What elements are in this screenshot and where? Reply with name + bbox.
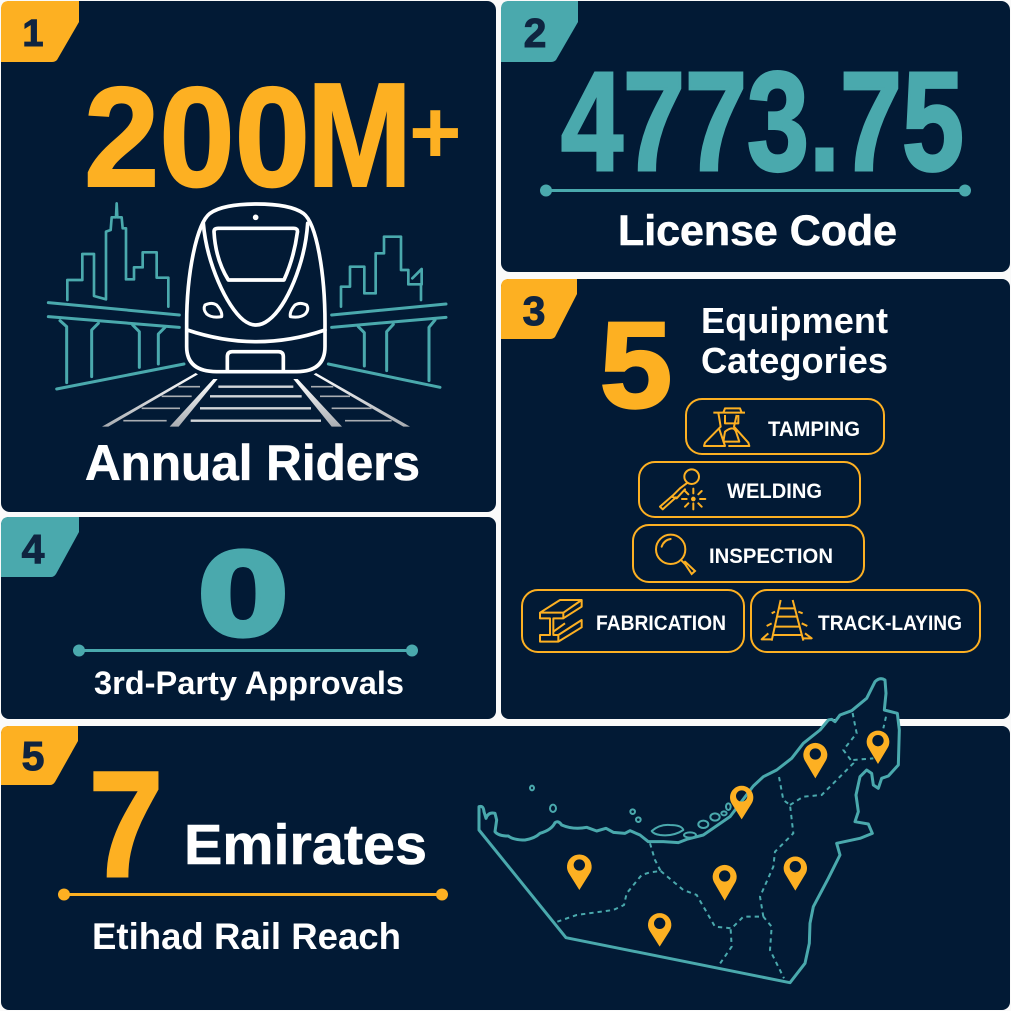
caption: rail reach: Etihad Rail Reach (92, 916, 401, 957)
panel: emirates reach (1, 679, 1010, 1010)
icon: welding torch (660, 469, 705, 509)
heading: emirates: Emirates (184, 813, 427, 877)
pill: tamping: TAMPING (768, 418, 860, 441)
pill: track-laying: TRACK-LAYING (818, 612, 962, 635)
pill: inspection (633, 525, 864, 582)
stat: 200M+: 200 (84, 58, 310, 217)
panel: annual riders (1, 1, 496, 512)
icon: magnifying glass (656, 535, 695, 574)
illustration: train and city skyline (48, 203, 446, 427)
caption: license code: License Code (618, 207, 897, 255)
badge: 1: 1 (22, 13, 44, 55)
map: UAE with pins (479, 679, 899, 983)
left viaduct (48, 303, 184, 389)
pill: fabrication (522, 590, 744, 652)
pill: inspection: INSPECTION (709, 545, 833, 568)
heading: equipment categories (701, 300, 888, 381)
stat: 7: 7 (89, 740, 163, 908)
icon: steel I-beam (540, 600, 582, 642)
map outline (479, 679, 899, 983)
panel: third-party approvals (1, 517, 496, 719)
badge: 4 (1, 517, 79, 577)
badge: 5 (1, 726, 78, 785)
panel: license code (501, 1, 1010, 272)
stat: 0: 0 (197, 529, 289, 662)
right skyline (341, 237, 422, 307)
icon: tamping machine (704, 408, 749, 446)
badge: 2 (501, 1, 578, 62)
islands (530, 786, 731, 838)
divider with end dots (73, 644, 418, 656)
panel: equipment categories (501, 279, 1010, 719)
right viaduct (328, 304, 446, 387)
railway track (102, 373, 410, 427)
map pins (567, 731, 889, 947)
stat: 200M+ (84, 53, 462, 218)
pill: welding: WELDING (727, 480, 822, 503)
badge: 4: 4 (22, 526, 45, 572)
badge: 2: 2 (524, 10, 546, 56)
divider with end dots (58, 888, 448, 900)
divider with end dots (540, 184, 971, 196)
badge: 3 (501, 279, 577, 339)
stat: 200M+: + (409, 83, 462, 183)
pill: welding (639, 462, 860, 517)
heading: equipment categories: Categories (701, 340, 888, 381)
left skyline (67, 203, 168, 307)
badge: 3: 3 (523, 288, 545, 334)
heading: equipment categories: Equipment (701, 300, 888, 341)
icon: railway track (762, 600, 812, 641)
caption: approvals: 3rd-Party Approvals (94, 665, 404, 701)
pill: tamping (686, 399, 884, 454)
badge: 1 (1, 1, 79, 62)
train front (187, 204, 325, 372)
caption: annual riders: Annual Riders (85, 435, 420, 491)
pill: track-laying (751, 590, 980, 652)
pill: fabrication: FABRICATION (596, 612, 726, 635)
internal borders (557, 712, 886, 978)
badge: 5: 5 (22, 733, 44, 779)
stat: 200M+: M (307, 53, 412, 218)
stat: 5: 5 (600, 297, 672, 433)
